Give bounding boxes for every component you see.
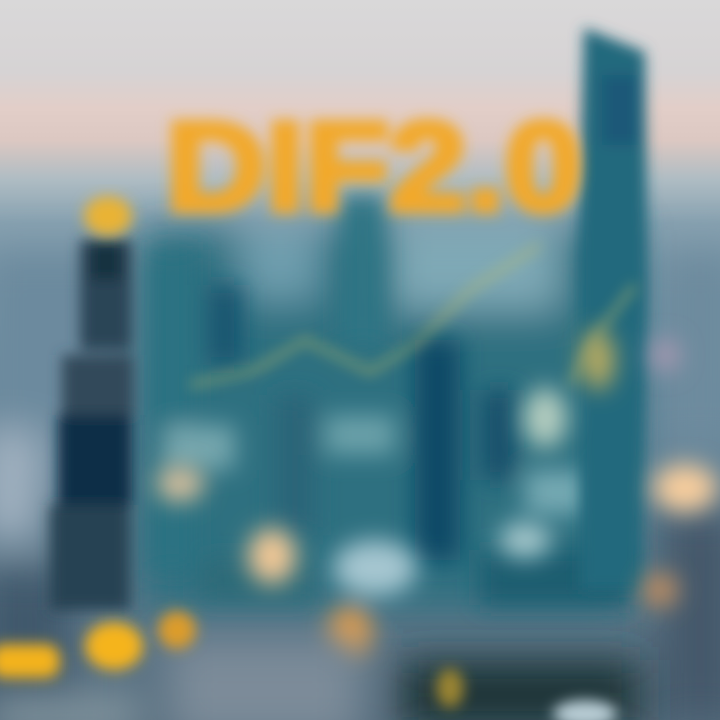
title: DIF2.0: DIF2.0 [166,96,582,237]
central tower cluster [140,225,630,610]
central skyscrapers [150,195,630,605]
warm and pale city lights [156,330,717,658]
golden lights lower left [0,611,617,720]
distant city haze [0,250,720,720]
right tall tower [578,28,648,590]
yellow trend line [190,245,635,385]
left dark tower [50,240,134,610]
left tower golden cap [84,196,132,236]
street foreground [0,640,640,720]
